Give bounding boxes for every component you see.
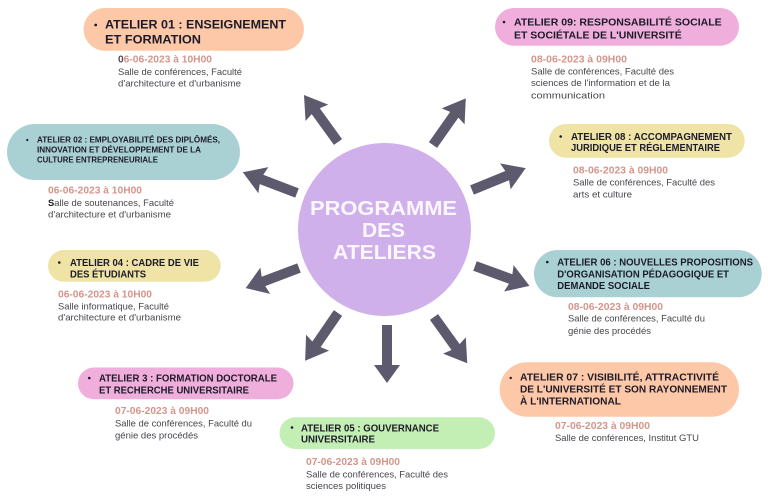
details: atelier 01: d'architecture et d'urbanisme [118, 78, 241, 89]
details: atelier 01: 06-06-2023 à 10H00 [118, 54, 213, 65]
pill heading: atelier 02: CULTURE ENTREPRENEURIALE [37, 155, 158, 165]
arrow: to atelier 07 [423, 309, 479, 371]
arrow: to atelier 06 [470, 253, 534, 299]
pill heading: atelier 01: ATELIER 01 : ENSEIGNEMENT [105, 17, 287, 31]
pill heading: atelier 04: DES ÉTUDIANTS [70, 267, 146, 280]
arrow: to atelier 01 [293, 87, 349, 150]
pill heading: atelier 01 [84, 8, 304, 51]
arrow: to atelier 05 [374, 325, 400, 383]
details: atelier 01: Salle de conférences, Faculté [118, 66, 242, 77]
pill heading: atelier 02: ATELIER 02 : EMPLOYABILITÉ DES DIPLÔMÉS, [37, 134, 220, 145]
central circle: programme des ateliers: ATELIERS [333, 241, 436, 264]
pill heading: atelier 09 [495, 8, 739, 46]
details: atelier 04 [58, 289, 181, 323]
details: atelier 09: communication [531, 89, 605, 100]
arrow: to atelier 3 [294, 305, 350, 369]
details: atelier 3 [115, 406, 252, 440]
details: atelier 04: d'architecture et d'urbanisme [58, 312, 181, 323]
details: atelier 04: 06-06-2023 à 10H00 [58, 289, 153, 300]
pill heading: atelier 06: D'ORGANISATION PÉDAGOGIQUE ET [557, 267, 729, 280]
panel: atelier 08 [549, 124, 745, 199]
pill heading: atelier 05: UNIVERSITAIRE [301, 434, 375, 445]
pill heading: atelier 3: ATELIER 3 : FORMATION DOCTORALE [99, 374, 277, 385]
pill heading: atelier 06 [534, 250, 762, 297]
pill heading: atelier 02 [7, 124, 240, 180]
details: atelier 06: Salle de conférences, Faculté du [568, 313, 705, 324]
pill heading: atelier 09: ET SOCIÉTALE DE L'UNIVERSITÉ [514, 28, 682, 41]
details: atelier 3: génie des procédés [115, 429, 198, 440]
details: atelier 08: 08-06-2023 à 09H00 [573, 165, 669, 176]
pill heading: atelier 08: ATELIER 08 : ACCOMPAGNEMENT [571, 132, 732, 143]
details: atelier 05 [306, 457, 448, 491]
pill heading: atelier 06: ATELIER 06 : NOUVELLES PROPOSITIONS [557, 258, 753, 269]
panel: atelier 02 [7, 124, 240, 220]
details: atelier 09: Salle de conférences, Faculté des [531, 65, 674, 76]
arrow: to atelier 09 [422, 90, 477, 153]
arrow: to atelier 08 [467, 155, 531, 203]
details: atelier 05: sciences politiques [306, 480, 386, 491]
details: atelier 06: 08-06-2023 à 09H00 [568, 302, 664, 313]
central circle: programme des ateliers: DES [362, 219, 405, 242]
details: atelier 3: 07-06-2023 à 09H00 [115, 406, 210, 417]
details: atelier 07: 07-06-2023 à 09H00 [555, 421, 651, 432]
details: atelier 02: Salle de soutenances, Faculté [48, 197, 174, 208]
details: atelier 05: Salle de conférences, Faculté des [306, 468, 448, 479]
pill heading: atelier 08: JURIDIQUE ET RÉGLEMENTAIRE [571, 141, 720, 154]
pill heading: atelier 3 [78, 368, 294, 399]
panel: atelier 06 [534, 250, 762, 336]
pill heading: atelier 06: DEMANDE SOCIALE [557, 281, 650, 292]
pill heading: atelier 07: ATELIER 07 : VISIBILITÉ, ATTRACTIVITÉ [520, 371, 719, 384]
details: atelier 02: 06-06-2023 à 10H00 [48, 186, 143, 196]
pill heading: atelier 05: ATELIER 05 : GOUVERNANCE [301, 424, 439, 435]
details: atelier 08: Salle de conférences, Faculté des [573, 177, 715, 188]
panel: atelier 04 [48, 250, 221, 323]
details: atelier 06 [568, 302, 705, 336]
details: atelier 07: Salle de conférences, Institut GTU [555, 432, 699, 443]
pill heading: atelier 02: INNOVATION ET DÉVELOPPEMENT DE LA [37, 144, 201, 155]
central circle: programme des ateliers [298, 143, 471, 316]
details: atelier 09: 08-06-2023 à 09H00 [531, 54, 628, 65]
details: atelier 02: d'architecture et d'urbanisme [48, 208, 171, 220]
pill heading: atelier 07 [500, 362, 739, 417]
panel: atelier 01 [84, 8, 304, 89]
details: atelier 08: arts et culture [573, 188, 632, 199]
pill heading: atelier 09: ATELIER 09: RESPONSABILITÉ SOCIALE [514, 16, 722, 29]
panel: atelier 3 [78, 368, 294, 440]
details: atelier 09: sciences de l'information et de la [531, 77, 671, 88]
central circle: programme des ateliers: PROGRAMME [310, 197, 457, 220]
pill heading: atelier 01: ET FORMATION [105, 32, 201, 46]
details: atelier 09 [531, 54, 674, 100]
pill heading: atelier 04 [48, 250, 221, 282]
details: atelier 3: Salle de conférences, Faculté du [115, 418, 252, 429]
pill heading: atelier 07: DE L'UNIVERSITÉ ET SON RAYONNEMENT [520, 383, 727, 396]
details: atelier 06: génie des procédés [568, 325, 651, 336]
arrow: to atelier 02 [238, 159, 302, 206]
pill heading: atelier 08 [549, 124, 745, 158]
pill heading: atelier 05 [280, 417, 495, 449]
details: atelier 02 [48, 186, 174, 220]
details: atelier 05: 07-06-2023 à 09H00 [306, 457, 401, 468]
details: atelier 04: Salle informatique, Faculté [58, 300, 169, 311]
panel: atelier 09 [495, 8, 739, 100]
panel: atelier 05 [280, 417, 495, 491]
pill heading: atelier 04: ATELIER 04 : CADRE DE VIE [70, 258, 199, 269]
details: atelier 01 [118, 54, 242, 89]
details: atelier 08 [573, 165, 715, 199]
arrow: to atelier 04 [241, 255, 304, 301]
panel: atelier 07 [500, 362, 739, 443]
pill heading: atelier 07: À L'INTERNATIONAL [520, 394, 621, 407]
details: atelier 07 [555, 421, 699, 443]
pill heading: atelier 3: ET RECHERCHE UNIVERSITAIRE [99, 385, 249, 396]
